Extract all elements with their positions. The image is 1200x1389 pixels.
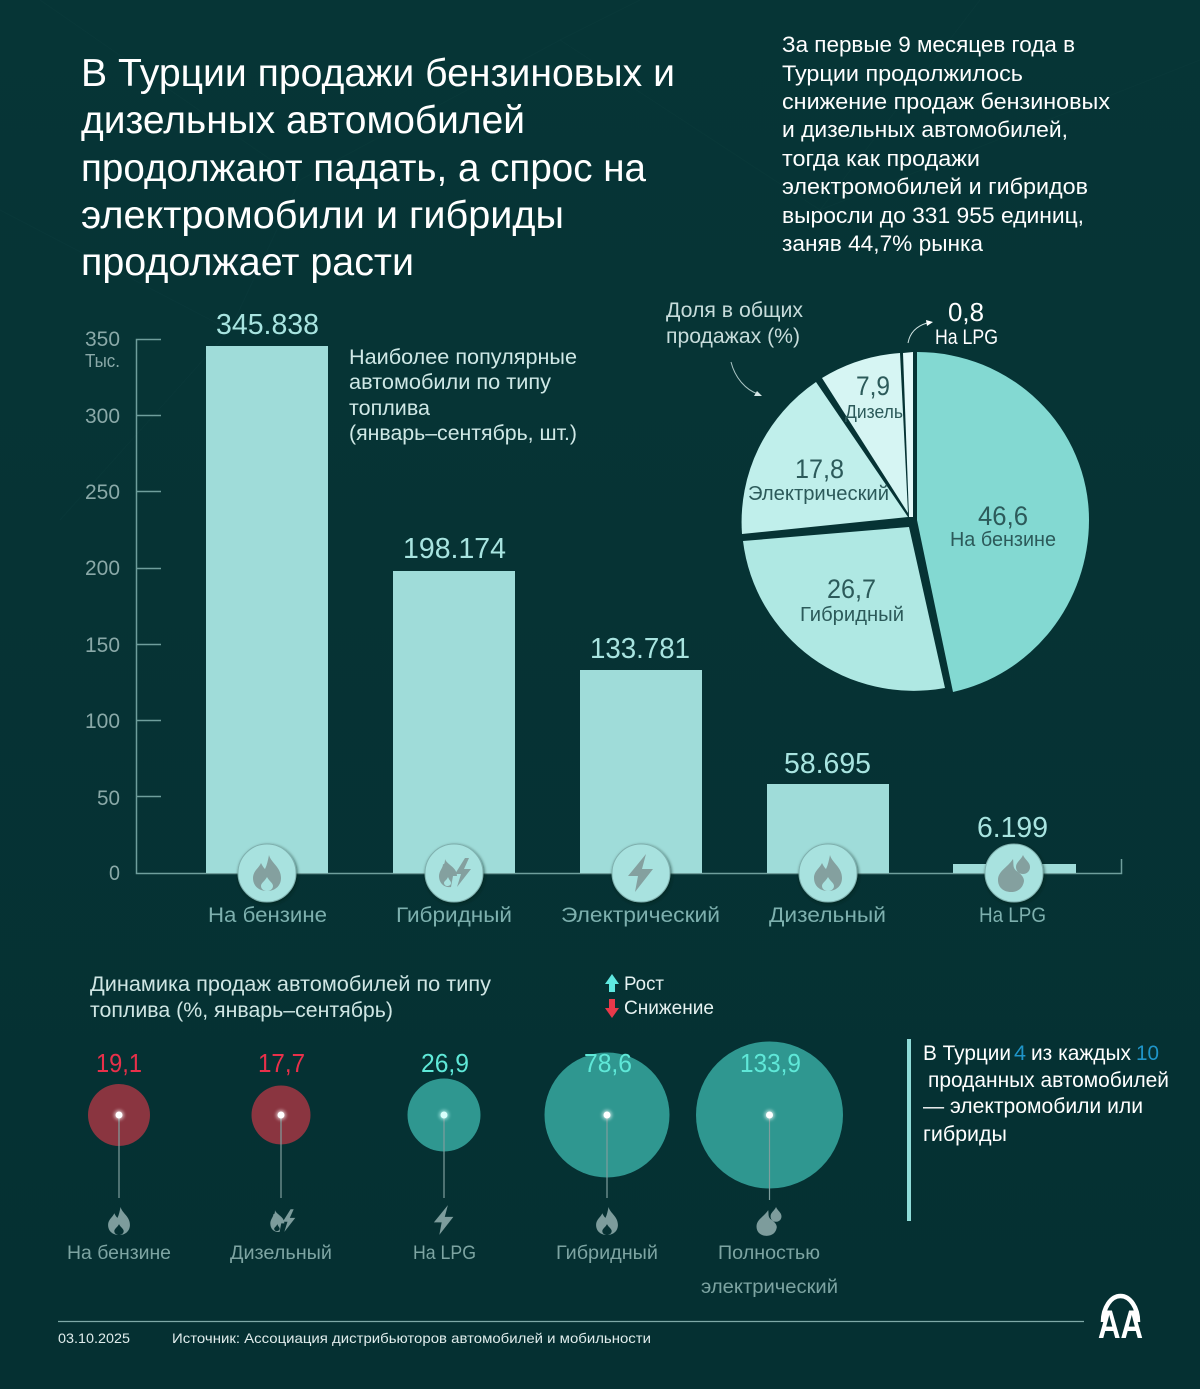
icon: electric bolt badge bbox=[612, 844, 670, 902]
lead text block: выросли до 331 955 единиц, bbox=[782, 203, 1084, 228]
footer bbox=[58, 1322, 1084, 1346]
icon: hybrid flame and bolt badge bbox=[425, 844, 483, 902]
callout: 4 bbox=[1014, 1042, 1026, 1065]
chart axis: 200 bbox=[85, 557, 120, 580]
section heading: sales dynamics: топлива (%, январь–сентябрь) bbox=[90, 999, 393, 1022]
title: продолжает расти bbox=[81, 241, 414, 284]
chart axis: 250 bbox=[85, 481, 120, 504]
chart axis: 50 bbox=[97, 787, 120, 810]
x-axis labels: На бензине bbox=[208, 904, 327, 927]
pie value: electric bbox=[748, 454, 889, 505]
pie value: petrol bbox=[950, 501, 1056, 551]
bubble: diesel bbox=[230, 1048, 332, 1264]
lead text block: заняв 44,7% рынка bbox=[782, 231, 984, 256]
lead text block bbox=[782, 32, 1110, 256]
callout: — электромобили или bbox=[923, 1095, 1143, 1118]
pie value: diesel: 7,9 bbox=[856, 371, 890, 401]
slice: petrol bbox=[917, 352, 1089, 692]
bubble: diesel: Дизельный bbox=[230, 1243, 332, 1264]
legend bbox=[605, 974, 714, 1019]
bar: LPG bbox=[953, 812, 1076, 873]
lead text block: электромобилей и гибридов bbox=[782, 174, 1088, 199]
arrow: LPG slice to label bbox=[908, 320, 933, 343]
callout: 10 bbox=[1136, 1042, 1159, 1065]
section heading: sales dynamics: Динамика продаж автомобилей по типу bbox=[90, 973, 492, 996]
bubble: petrol bbox=[67, 1048, 171, 1264]
slice: diesel bbox=[822, 353, 908, 513]
pie value: petrol: На бензине bbox=[950, 529, 1056, 551]
pie value: diesel bbox=[845, 371, 903, 422]
bar: electric: 133.781 bbox=[590, 633, 690, 665]
logo: AA bbox=[1098, 1296, 1143, 1347]
chart axis: 0 bbox=[109, 862, 120, 885]
lead text block: и дизельных автомобилей, bbox=[782, 117, 1068, 142]
arrow: caption to pie bbox=[731, 362, 762, 396]
legend: decline: Снижение bbox=[624, 998, 714, 1019]
title: электромобили и гибриды bbox=[81, 194, 564, 237]
pie value: hybrid bbox=[800, 574, 904, 626]
bar: diesel: 58.695 bbox=[784, 748, 871, 780]
lead text block: За первые 9 месяцев года в bbox=[782, 32, 1075, 57]
bubble: fully electric: 133,9 bbox=[740, 1048, 801, 1078]
footer: Источник: Ассоциация дистрибьюторов автомобилей и мобильности bbox=[172, 1330, 651, 1346]
lead text block: снижение продаж бензиновых bbox=[782, 89, 1110, 114]
bubble: LPG: На LPG bbox=[413, 1243, 476, 1264]
bubble: fully electric: электрический bbox=[701, 1277, 838, 1298]
footer: 03.10.2025 bbox=[58, 1330, 130, 1346]
legend: growth: Рост bbox=[624, 974, 664, 995]
bubble: diesel: 17,7 bbox=[258, 1048, 305, 1078]
chart axis bbox=[85, 328, 1122, 885]
x-axis labels: На LPG bbox=[979, 904, 1046, 927]
bar: hybrid bbox=[393, 533, 515, 873]
slice: electric bbox=[742, 382, 908, 534]
bar chart note bbox=[349, 346, 577, 445]
bar chart note: (январь–сентябрь, шт.) bbox=[349, 422, 577, 445]
x-axis labels bbox=[208, 904, 1046, 927]
pie value: electric: 17,8 bbox=[795, 454, 844, 484]
bar chart note: автомобили по типу bbox=[349, 371, 552, 394]
pie value: diesel: Дизель bbox=[845, 402, 903, 422]
slice: LPG bbox=[903, 352, 913, 517]
callout: проданных автомобилей bbox=[928, 1069, 1169, 1092]
bubble: fully electric: Полностью bbox=[718, 1243, 820, 1264]
chart axis: 150 bbox=[85, 634, 120, 657]
title: дизельных автомобилей bbox=[81, 99, 525, 142]
LPG label: 0,8 bbox=[948, 297, 984, 327]
section heading: sales dynamics bbox=[90, 973, 492, 1022]
bar: electric bbox=[580, 633, 702, 873]
bar: LPG: 6.199 bbox=[977, 812, 1048, 844]
LPG label bbox=[935, 297, 998, 349]
title: В Турции продажи бензиновых и bbox=[81, 52, 675, 95]
pie value: petrol: 46,6 bbox=[978, 501, 1028, 531]
callout: гибриды bbox=[923, 1123, 1007, 1146]
logo: AA: AA bbox=[1098, 1303, 1143, 1347]
bar chart note: топлива bbox=[349, 397, 430, 420]
x-axis labels: Гибридный bbox=[396, 904, 512, 927]
x-axis labels: Электрический bbox=[561, 904, 720, 927]
bubble: LPG: 26,9 bbox=[421, 1048, 469, 1078]
icon: diesel flame badge bbox=[799, 844, 857, 902]
pie value: hybrid: Гибридный bbox=[800, 604, 904, 626]
lead text block: тогда как продажи bbox=[782, 146, 980, 171]
callout: В Турции bbox=[923, 1042, 1011, 1065]
lead text block: Турции продолжилось bbox=[782, 61, 1023, 86]
callout: из каждых bbox=[1031, 1042, 1131, 1065]
pie chart caption: Доля в общих bbox=[666, 299, 804, 322]
chart axis: 100 bbox=[85, 710, 120, 733]
bubble: petrol: 19,1 bbox=[96, 1048, 142, 1078]
bar: hybrid: 198.174 bbox=[403, 533, 506, 565]
title bbox=[81, 52, 675, 284]
bubble: LPG bbox=[408, 1048, 480, 1264]
bubble: hybrid bbox=[544, 1048, 670, 1264]
bar chart note: Наиболее популярные bbox=[349, 346, 577, 369]
chart axis: 350 bbox=[85, 328, 120, 351]
pie value: hybrid: 26,7 bbox=[827, 574, 876, 604]
pie chart caption bbox=[666, 299, 804, 348]
pie chart caption: продажах (%) bbox=[666, 325, 800, 348]
chart axis: 300 bbox=[85, 405, 120, 428]
icon: LPG drops badge bbox=[985, 844, 1043, 902]
bubble: hybrid: 78,6 bbox=[584, 1048, 632, 1078]
callout bbox=[907, 1039, 1169, 1221]
pie value: electric: Электрический bbox=[748, 483, 889, 505]
slice: hybrid bbox=[743, 527, 945, 691]
bubble: fully electric bbox=[696, 1042, 843, 1298]
bar: petrol: 345.838 bbox=[216, 309, 319, 341]
x-axis labels: Дизельный bbox=[769, 904, 886, 927]
pie chart bbox=[742, 352, 1089, 692]
title: продолжают падать, а спрос на bbox=[81, 147, 646, 190]
LPG label: На LPG bbox=[935, 326, 998, 349]
bar: petrol bbox=[206, 309, 328, 873]
icon: petrol flame badge bbox=[238, 844, 296, 902]
bubble: hybrid: Гибридный bbox=[556, 1243, 658, 1264]
bar: diesel bbox=[767, 748, 889, 873]
chart axis: Тыс. bbox=[85, 351, 120, 371]
bar chart bbox=[85, 309, 1122, 927]
bubble: petrol: На бензине bbox=[67, 1243, 171, 1264]
